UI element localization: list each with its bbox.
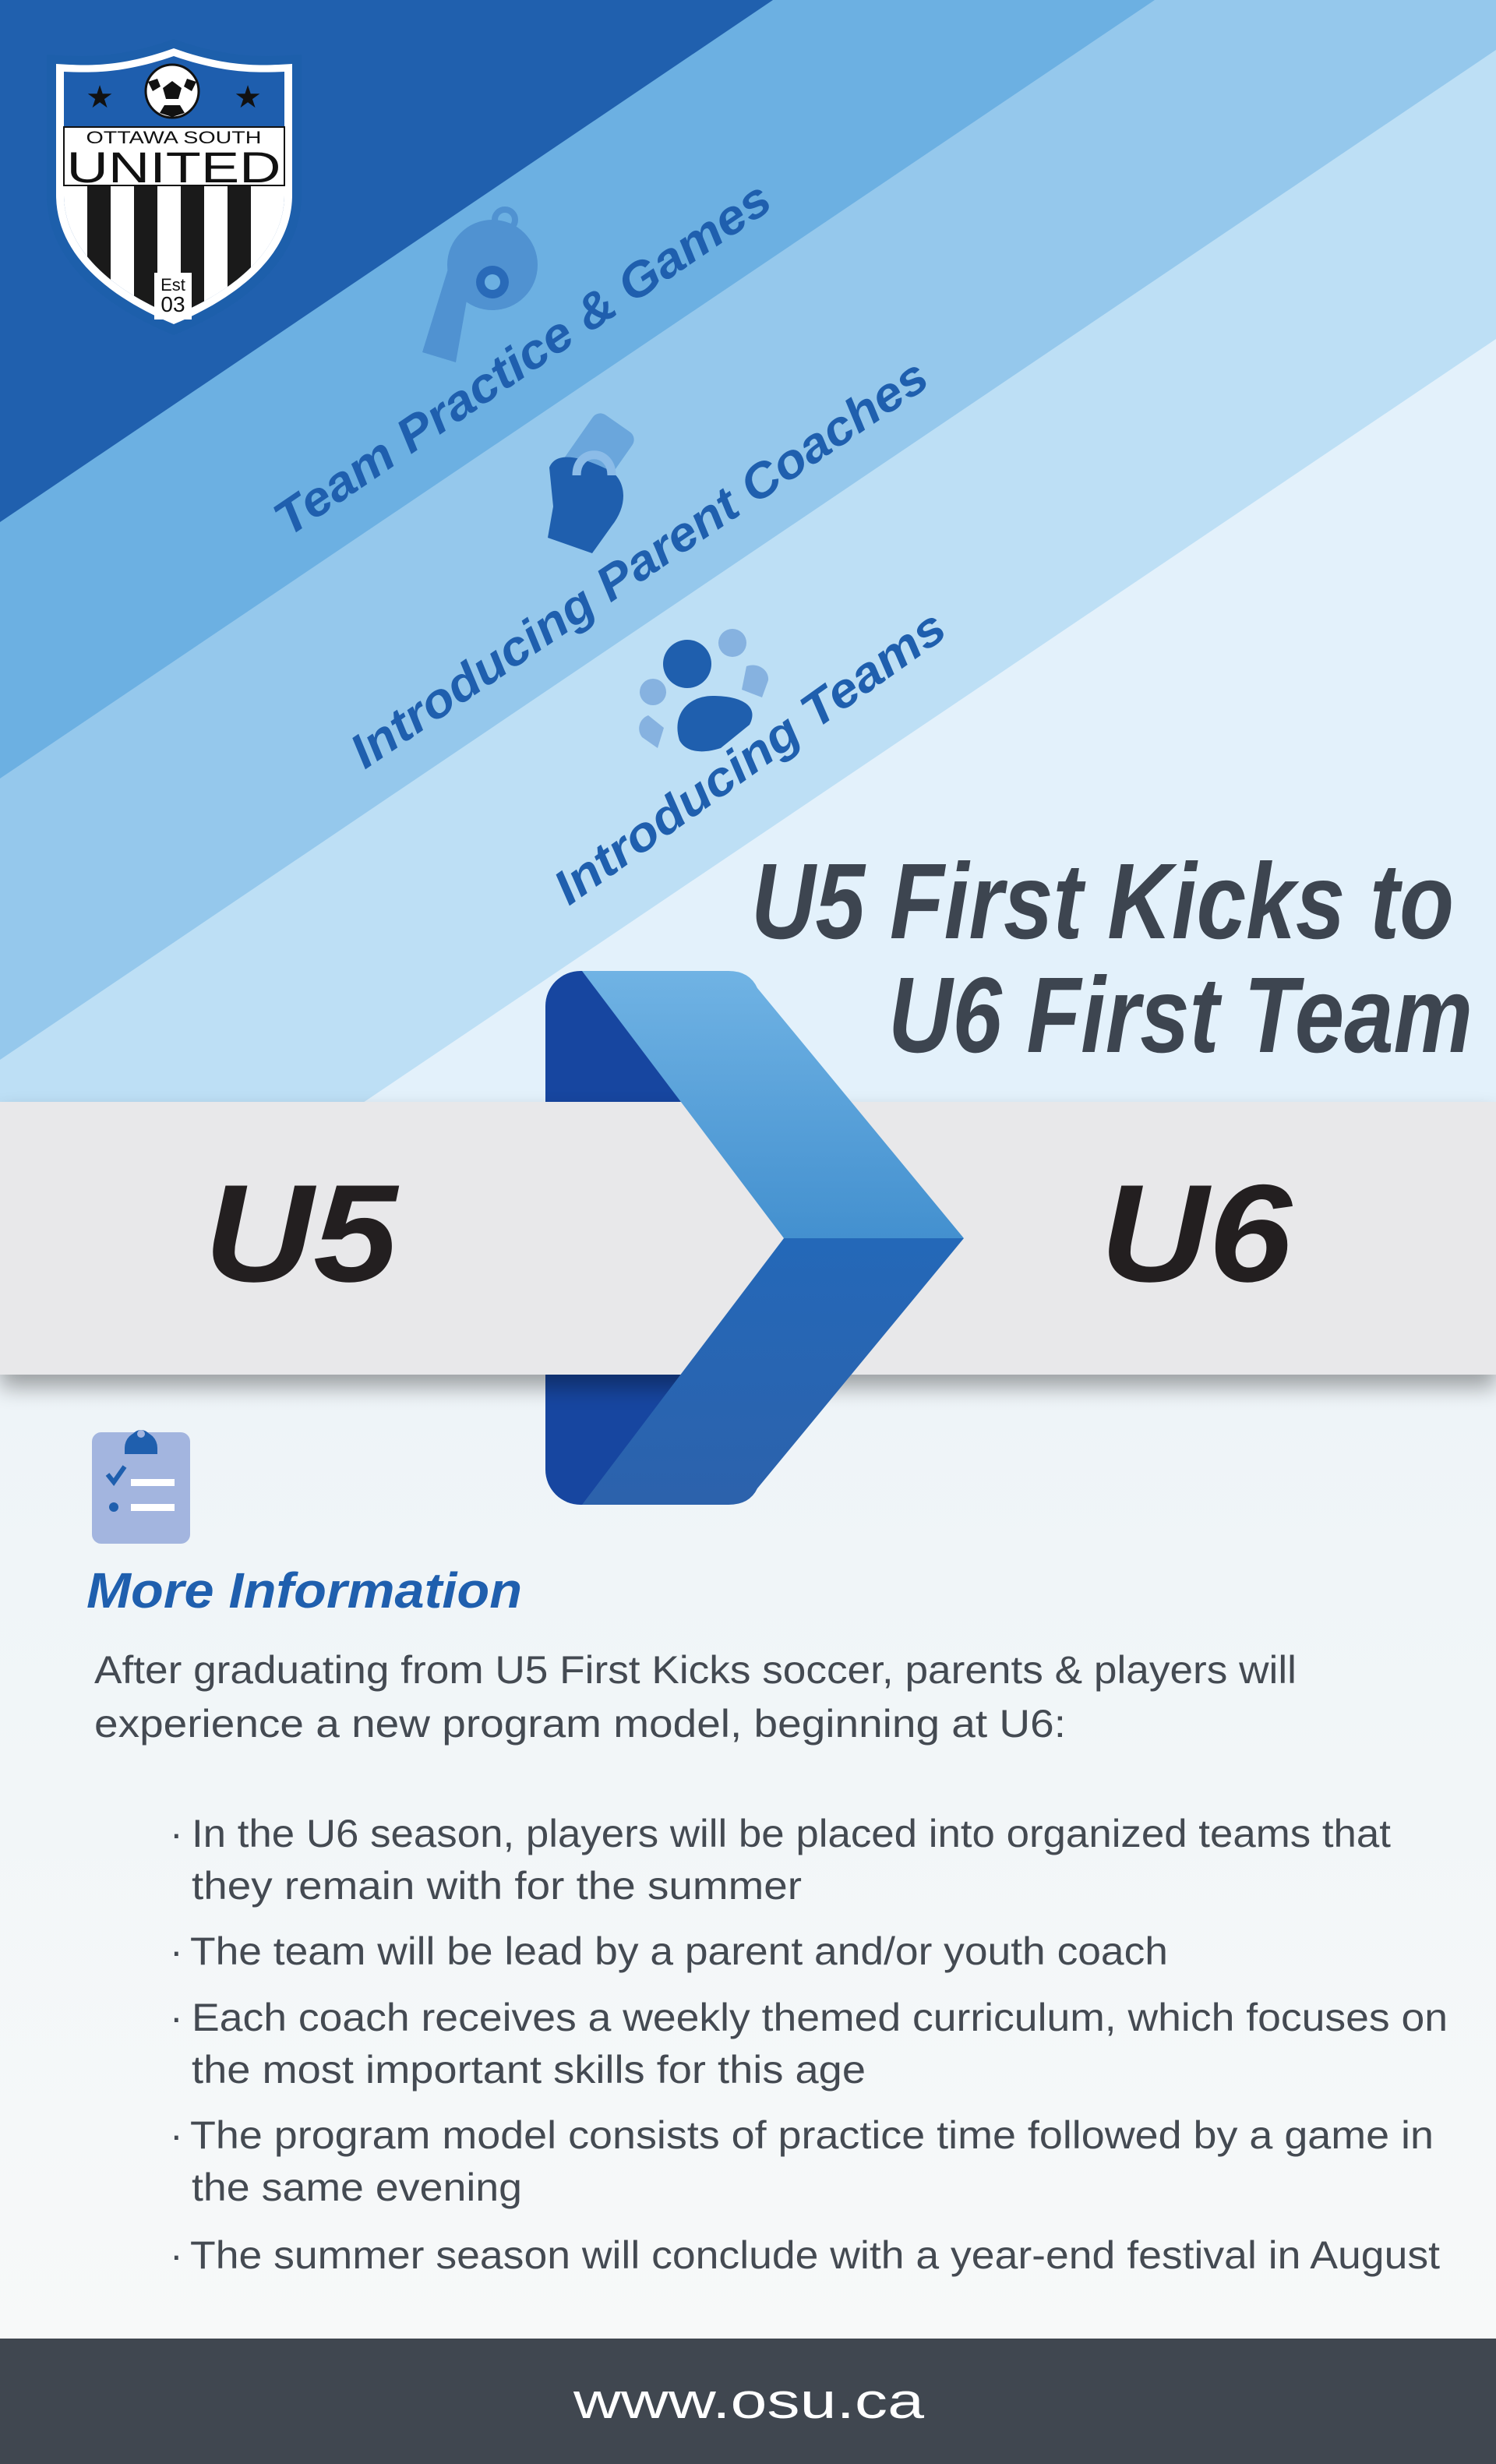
logo: Ottawa South United shield: ★ [86,80,114,115]
chevron back [545,971,725,1505]
bullet list: · [170,1929,183,1973]
footer [0,2339,1496,2464]
chevron arrow [582,971,964,1505]
footer: www.osu.ca [573,2373,925,2429]
logo: Ottawa South United shield [56,48,292,324]
bullet list [170,1812,1448,2277]
gray band shadow [0,1114,1496,1387]
logo: Ottawa South United shield: UNITED [67,143,280,192]
intro paragraph: After graduating from U5 First Kicks soccer, parents & players will [94,1648,1297,1692]
intro paragraph [94,1648,1297,1746]
heading: More Information: More Information [86,1562,522,1619]
label: U5: U5 [204,1156,400,1311]
bullet list: the same evening [192,2166,522,2209]
intro paragraph: experience a new program model, beginning at U6: [94,1702,1066,1746]
diagonal label: Team Practice & Games: Team Practice & Games [264,171,781,547]
bullet list: · [170,2233,183,2277]
icon: team people [639,629,768,751]
diagonal label: Introducing Teams: Introducing Teams [544,600,956,915]
label: U6: U6 [1100,1156,1293,1311]
bullet list: · [170,1812,183,1855]
bullet list: · [170,2113,183,2157]
bullet list: Each coach receives a weekly themed curriculum, which focuses on [192,1996,1448,2039]
bullet list: The team will be lead by a parent and/or youth coach [190,1929,1168,1973]
logo: Ottawa South United shield: 03 [161,292,185,316]
icon: handshake [548,410,637,553]
bullet list: In the U6 season, players will be placed into organized teams that [192,1812,1391,1855]
bullet list: The summer season will conclude with a year-end festival in August [190,2233,1440,2277]
gray band [0,1102,1496,1375]
bullet list: the most important skills for this age [192,2048,866,2092]
bullet list: they remain with for the summer [192,1864,802,1908]
title [751,842,1473,1075]
bullet list: The program model consists of practice time followed by a game in [190,2113,1434,2157]
logo: Ottawa South United shield: ★ [234,80,262,115]
icon: whistle [422,210,538,362]
bullet list: · [170,1996,183,2039]
logo: Ottawa South United shield: Est [161,275,185,295]
icon: clipboard [92,1430,190,1544]
logo: Ottawa South United shield: OTTAWA SOUTH [86,128,262,147]
diagonal label: Introducing Parent Coaches: Introducing Parent Coaches [340,349,938,779]
